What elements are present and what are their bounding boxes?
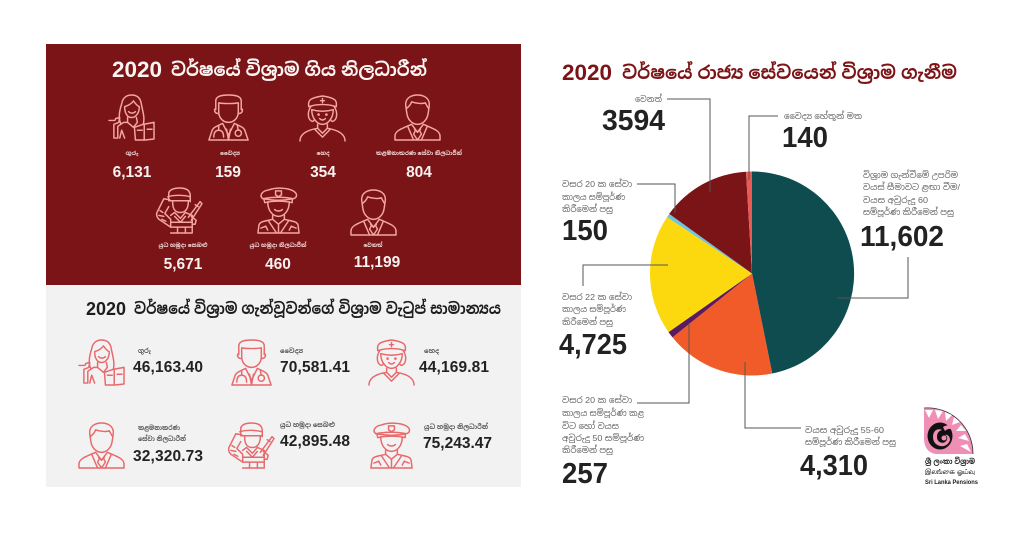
stat: army soldiers: 5,671 [164,256,203,273]
callout: age 55-60: 4,310 [800,450,868,482]
callout: 20 years service: කිරීමෙන් පසු [562,203,613,214]
callout: 20 years or age 50: කිරීමෙන් පසු [562,444,613,455]
stat: army officers [250,188,307,273]
average: management service officers: සේවා නිලධාරීන් [138,434,187,443]
callout: other: වෙනත් [635,93,663,104]
callout: age 55-60 [745,362,896,482]
callout: medical grounds [749,110,862,180]
callout: maximum age: 11,602 [860,221,944,253]
callout: 20 years or age 50 [562,323,689,490]
average: army soldiers: යුධ හමුදා සෙබළු [280,421,335,429]
average: management service officers: කළමනාකරණ [138,424,180,432]
callout: 20 years or age 50: විට හෝ වයස [562,420,619,431]
heading: retirement from state service: 2020 [562,60,612,85]
pie chart [650,171,854,376]
stat: army officers: යුධ හමුදා නිලධාරීන් [250,241,307,249]
callout: 20 years or age 50: අවුරුදු 50 සම්පූර්ණ [562,432,644,443]
callout: 20 years service: කාලය සම්පූර්ණ [562,191,625,202]
callout: 20 years or age 50: කාලය සම්පූර්ණ කළ [562,407,645,418]
average: army soldiers [229,421,350,468]
callout: maximum age: විශ්‍රාම ගැන්වීමේ උපරිම [863,169,958,180]
stat: army soldiers: යුධ හමුදා සෙබළු [158,242,208,249]
average: nurses: හෙද [424,348,440,355]
stat: army soldiers [157,188,208,273]
average: doctors: 70,581.41 [280,359,350,376]
callout: medical grounds: 140 [782,122,828,154]
average: teachers: ගුරු [138,347,152,355]
average: army officers [371,422,492,468]
callout: other [602,93,710,192]
stat: doctors [209,95,248,181]
average: doctors [232,340,350,385]
stat: nurses: හෙද [316,151,330,157]
stat: other: වෙනත් [364,241,383,249]
callout: 20 years service [562,178,675,247]
average: nurses [369,340,489,385]
callout: 22 years service: 4,725 [559,329,627,361]
stat: nurses: 354 [310,164,336,181]
stat: other: 11,199 [354,254,401,271]
callout: 20 years or age 50: වසර 20 ක සේවා [562,394,632,405]
stat: doctors: වෛද්‍ය [220,150,240,157]
stat: management service officers: 804 [406,164,432,181]
stat: nurses [300,96,345,181]
callout: age 55-60: සම්පූර්ණ කිරීමෙන් පසු [805,436,896,447]
stat: army officers: 460 [265,256,291,273]
heading: retirement from state service [562,60,957,85]
callout: maximum age: සම්පූර්ණ කිරීමෙන් පසු [863,206,954,217]
stat: management service officers [376,95,463,181]
average: army soldiers: 42,895.48 [280,433,350,450]
callout: medical grounds: වෛද්‍ය හේතූන් මත [784,110,862,121]
heading: retired officers: 2020 [112,57,162,82]
stat: management service officers: කළමනාකරණ සේවා නිලධාරීන් [376,149,463,157]
callout: maximum age: වයස් සීමාවට ළඟා වීම/ [863,181,961,192]
callout: maximum age [837,169,961,298]
callout: 20 years or age 50: 257 [562,458,608,490]
average: teachers: 46,163.40 [133,359,203,376]
callout: other: 3594 [602,105,665,137]
stat: doctors: 159 [215,164,241,181]
heading: retirement from state service: වර්ෂයේ රාජ්‍ය සේවයෙන් විශ්‍රාම ගැනීම [622,60,957,84]
average: management service officers: 32,320.73 [133,448,203,465]
average: nurses: 44,169.81 [419,359,489,376]
panel: retired officers [46,44,521,285]
callout: 22 years service: වසර 22 ක සේවා [562,291,632,302]
logo: Sri Lanka Pensions [924,408,978,486]
callout: 22 years service: කිරීමෙන් පසු [562,316,613,327]
callout: maximum age: වයස අවුරුදු 60 [863,195,928,205]
stat: other [351,190,401,271]
panel: average pension [46,285,521,487]
stat: teachers: ගුරු [126,150,139,157]
stat: teachers [109,95,154,181]
average: doctors: වෛද්‍ය [280,347,304,355]
logo: Sri Lanka Pensions: இலங்கை ஓய்வு [925,468,975,476]
callout: 22 years service [559,265,668,361]
callout: 20 years service: වසර 20 ක සේවා [562,178,632,189]
average: teachers [79,340,203,385]
average: management service officers [79,423,203,468]
heading: average pension [86,298,501,319]
callout: age 55-60: වයස අවුරුදු 55-60 [805,425,884,435]
heading: average pension: 2020 [86,298,126,319]
logo: Sri Lanka Pensions: ශ්‍රී ලංකා විශ්‍රාම [925,457,975,466]
callout: 20 years service: 150 [562,215,608,247]
heading: average pension: වර්ෂයේ විශ්‍රාම ගැන්වූවන්ගේ විශ්‍රාම වැටුප් සාමාන්‍යය [134,299,501,318]
stat: teachers: 6,131 [113,164,152,181]
average: army officers: 75,243.47 [423,435,492,452]
heading: retired officers: වර්ෂයේ විශ්‍රාම ගිය නිලධාරීන් [171,57,427,81]
average: army officers: යුධ හමුදා නිලධාරීන් [424,422,489,431]
callout: 22 years service: කාලය සම්පූර්ණ [562,303,626,314]
logo: Sri Lanka Pensions: Sri Lanka Pensions [925,479,978,486]
heading: retired officers [112,57,427,82]
